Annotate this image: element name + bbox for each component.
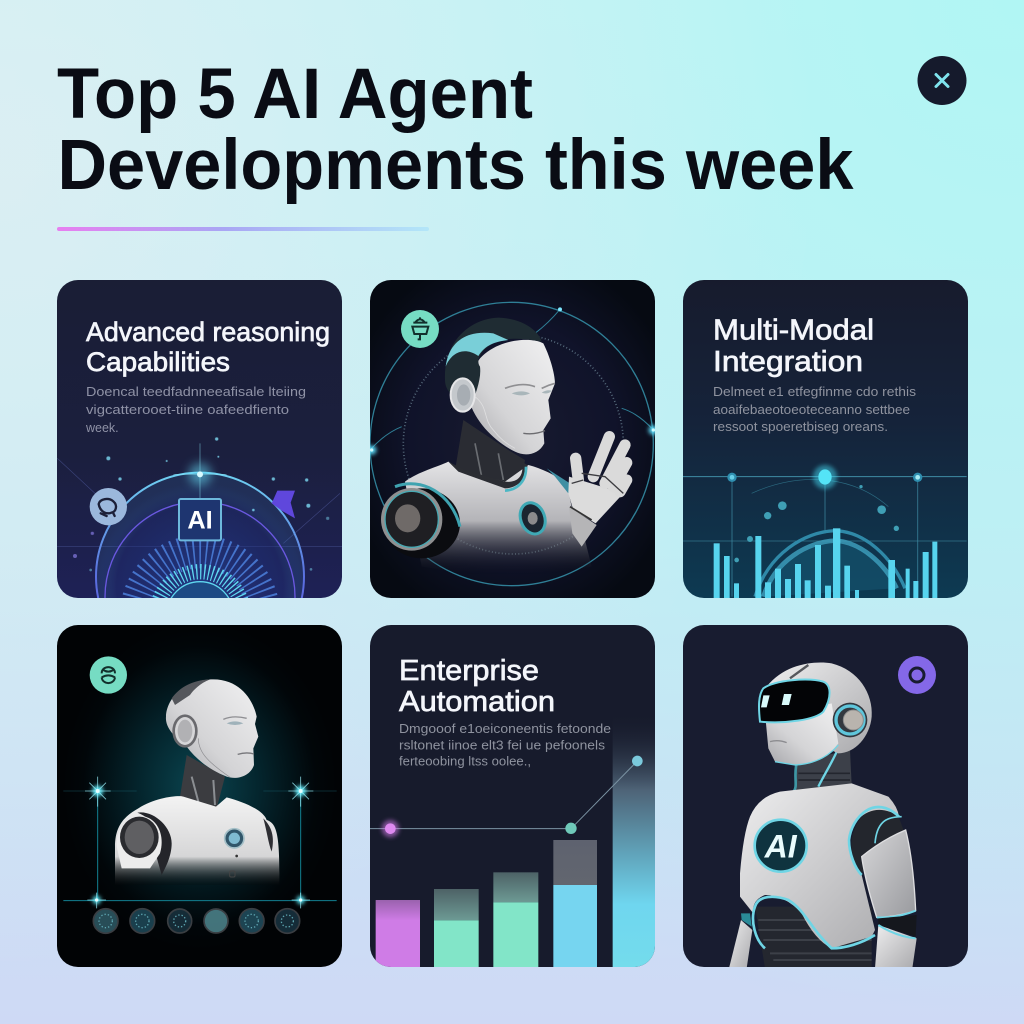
title: Developments this week <box>58 126 854 205</box>
panel: enterprise automation <box>370 625 656 968</box>
heading: enterprise automation <box>398 658 554 712</box>
robot figure <box>115 679 279 885</box>
body text <box>399 722 611 768</box>
stacked bar chart with trend line <box>370 738 655 967</box>
icon badge <box>90 488 127 525</box>
panel: robot waving <box>367 280 658 598</box>
body text: aoaifebaeotoeoteceanno settbee <box>713 403 910 417</box>
helmet <box>767 662 872 753</box>
body text <box>713 385 916 434</box>
body text: vigcatterooet-tiine oafeedfiento <box>86 403 289 417</box>
left arm <box>729 920 752 968</box>
icon badge <box>90 656 127 694</box>
body text: Delmeet e1 etfegfinme cdo rethis <box>713 385 916 399</box>
icon badge <box>898 656 936 694</box>
AI chip: AI <box>187 507 213 535</box>
bar chart with network nodes <box>682 465 967 598</box>
robot figure <box>729 662 917 968</box>
title underline <box>57 227 429 231</box>
body text: ressoot spoeretbiseg oreans. <box>713 420 888 434</box>
body text: ferteoobing ltss oolee., <box>399 754 531 768</box>
frame lines and stars <box>63 777 337 908</box>
hand <box>568 477 623 523</box>
body text: Doencal teedfadnneeafisale lteiing <box>86 385 306 399</box>
robot figure <box>381 318 627 580</box>
icon badge <box>401 310 439 348</box>
heading: enterprise automation: Automation <box>399 686 555 718</box>
close button icon <box>918 56 966 105</box>
body text: week. <box>85 421 119 435</box>
heading: multi-modal integration: Multi-Modal <box>713 314 874 346</box>
chest badge <box>755 820 807 872</box>
panel: AI visor robot <box>683 625 968 968</box>
heading: multi-modal integration <box>713 314 874 378</box>
illustration: AI sphere <box>50 437 350 692</box>
heading: advanced reasoning: Advanced reasoning <box>86 317 330 347</box>
head <box>465 340 555 454</box>
arm plate <box>862 830 916 917</box>
torso <box>740 783 899 948</box>
head <box>166 679 258 778</box>
heading: multi-modal integration: Integration <box>713 346 863 378</box>
panel: advanced reasoning capabilities <box>50 280 350 692</box>
title <box>57 55 854 205</box>
shoulder cavity <box>852 810 904 873</box>
body text: rsltonet iinoe elt3 fei ue pefoonels <box>399 738 605 752</box>
orbit rings <box>367 302 658 586</box>
lower torso <box>755 907 872 968</box>
chest badge: AI <box>764 828 798 864</box>
heading: advanced reasoning: Capabilities <box>86 347 230 377</box>
row of six small circular icons <box>93 909 300 933</box>
panel: robot bust <box>57 625 342 967</box>
heading: advanced reasoning <box>86 317 330 377</box>
AI chip <box>179 499 221 540</box>
body text <box>85 385 306 435</box>
heading: enterprise automation: Enterprise <box>399 655 539 687</box>
title: Top 5 AI Agent <box>57 55 533 134</box>
panel: multi-modal integration <box>682 280 968 598</box>
body text: Dmgooof e1oeiconeentis fetoonde <box>399 722 611 736</box>
